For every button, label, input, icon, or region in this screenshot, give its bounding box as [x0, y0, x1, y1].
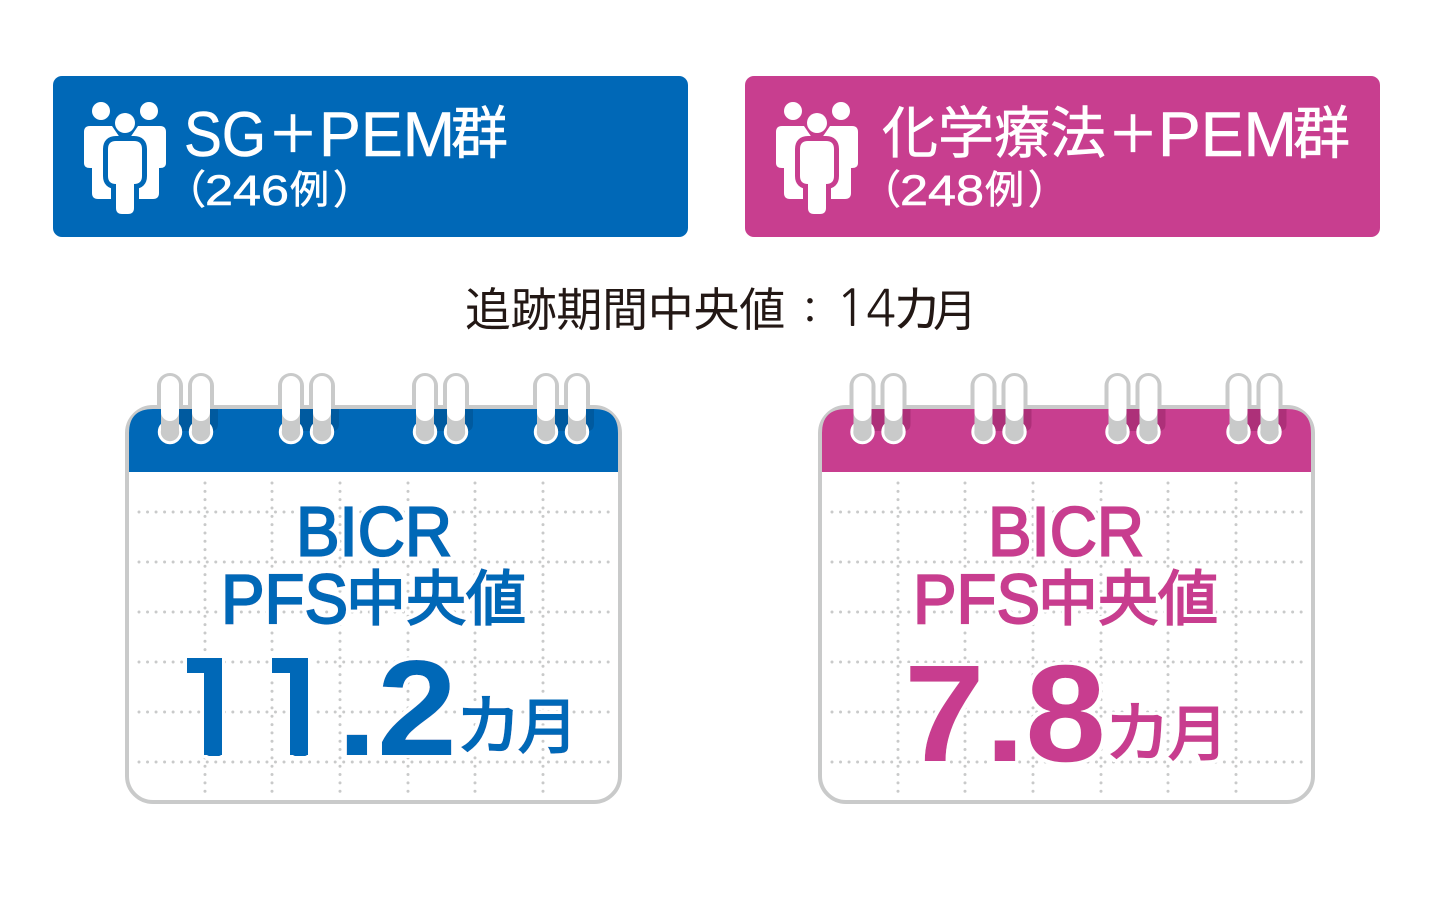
text: median follow-up: 追跡期間中央値: [465, 284, 785, 336]
text: 248例: [861, 167, 1068, 215]
unit: months: 月: [1168, 701, 1228, 768]
label: BICR: BICR: [296, 492, 452, 570]
heading: 化学療法+PEM群: 化学療法: [882, 102, 1106, 165]
calendar rings: [159, 375, 594, 443]
text: 246例: 例: [290, 170, 329, 212]
value: 11.2: [187, 656, 452, 759]
value: 11.2: .2: [337, 632, 457, 784]
label: PFS median: 中央値: [346, 566, 526, 633]
icon: people group blue: [84, 102, 166, 214]
panel: SG+PEM group: [53, 76, 688, 237]
unit: months: カ: [1104, 696, 1170, 770]
heading: SG+PEM群: [184, 100, 508, 170]
text: 246例: [166, 167, 373, 215]
text: median follow-up: 月: [933, 287, 977, 336]
text: median follow-up: カ: [892, 282, 942, 338]
label: PFS median: PFS: [221, 560, 348, 638]
heading: 化学療法+PEM群: ＋: [1108, 107, 1158, 163]
calendar: chemo+PEM: [820, 375, 1313, 802]
text: 248例: 例: [985, 170, 1024, 212]
heading: SG+PEM群: PEM: [319, 100, 455, 170]
heading: SG+PEM群: SG: [184, 100, 266, 170]
unit: months: 月: [518, 694, 578, 761]
icon: people group magenta: [776, 102, 858, 214]
label: PFS median: 中央値: [1038, 566, 1218, 633]
text: median follow-up: [465, 282, 977, 338]
label: BICR: BICR: [988, 492, 1144, 570]
text: 246例: （: [166, 168, 206, 212]
text: 246例: ）: [333, 168, 373, 212]
label: PFS median: PFS: [913, 560, 1040, 638]
text: 248例: 248: [900, 167, 984, 215]
heading: SG+PEM群: ＋: [268, 107, 318, 163]
calendar rings: [852, 375, 1286, 443]
panel: chemo+PEM group: [745, 76, 1380, 237]
text: median follow-up: ：: [792, 290, 828, 331]
value: 11.2: 11: [174, 653, 335, 774]
heading: 化学療法+PEM群: PEM: [1158, 100, 1297, 170]
calendar: SG+PEM: [127, 375, 620, 802]
unit: months: カ: [456, 689, 522, 763]
text: median follow-up: 14: [836, 284, 896, 334]
unit: months: [1104, 696, 1228, 770]
heading: 化学療法+PEM群: 群: [1293, 102, 1350, 166]
text: 246例: 246: [205, 167, 289, 215]
text: 248例: （: [861, 168, 901, 212]
label: PFS median: [221, 560, 526, 638]
heading: 化学療法+PEM群: [882, 100, 1350, 170]
text: 248例: ）: [1028, 168, 1068, 212]
label: PFS median: [913, 560, 1218, 638]
value: 7.8: 7.8: [904, 637, 1106, 791]
heading: SG+PEM群: 群: [451, 102, 508, 166]
unit: months: [456, 689, 578, 763]
